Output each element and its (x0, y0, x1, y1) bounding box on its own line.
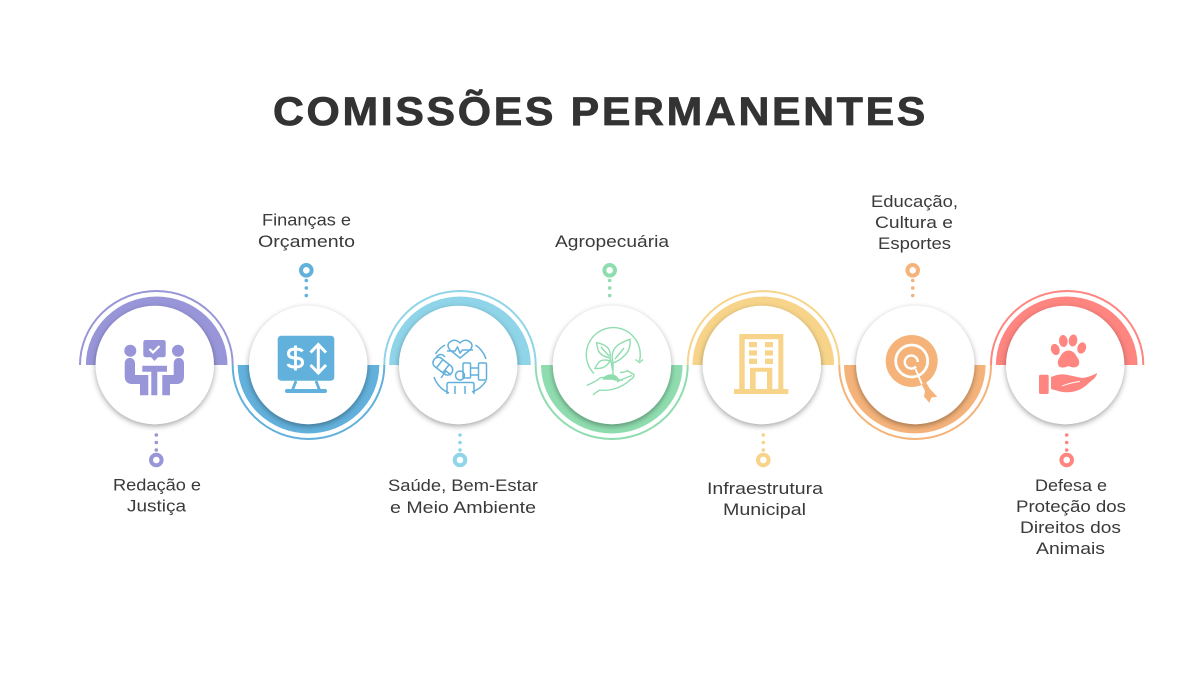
ring marker (1061, 455, 1072, 465)
icon: health and wellbeing (431, 340, 486, 394)
label: e Meio Ambiente (390, 499, 536, 517)
icon: meeting at table (124, 340, 184, 395)
panel: Agropecuária (536, 233, 688, 439)
label (1016, 477, 1126, 558)
label (388, 477, 539, 517)
label: Redação e (113, 476, 201, 494)
label: Direitos dos (1020, 519, 1121, 537)
label (113, 476, 201, 516)
connector dots (304, 279, 308, 297)
panel: Defesa e Proteção dos Direitos dos Animais (991, 291, 1143, 558)
ring marker (455, 455, 465, 465)
icon: monitor with dollar and arrows (278, 336, 334, 393)
label: Justiça (127, 498, 187, 516)
icon: target with arrow (886, 335, 938, 403)
label: Educação, (871, 193, 958, 211)
panel: Saúde, Bem-Estar e Meio Ambiente (384, 291, 539, 517)
label: Animais (1036, 540, 1105, 558)
icon: building (734, 334, 788, 394)
icon: plant in hand (586, 328, 643, 395)
label (871, 193, 958, 253)
label: Finanças e (262, 212, 351, 230)
label (707, 480, 824, 519)
panel: Finanças e Orçamento (233, 212, 384, 439)
label: Saúde, Bem-Estar (388, 477, 539, 495)
label: Esportes (878, 235, 951, 253)
connector dots (608, 279, 612, 297)
label: Proteção dos (1016, 498, 1126, 516)
connector dots (154, 433, 158, 452)
ring marker (907, 265, 918, 276)
panel: Educação, Cultura e Esportes (839, 193, 991, 439)
connector dots (911, 279, 914, 297)
label: Orçamento (258, 233, 355, 251)
label (258, 212, 355, 251)
label: Infraestrutura (707, 480, 824, 498)
label: Agropecuária (555, 233, 670, 251)
label: Defesa e (1035, 477, 1107, 495)
panel: Redação e Justiça (80, 291, 233, 516)
label: Cultura e (875, 214, 953, 232)
panel: Infraestrutura Municipal (688, 291, 839, 519)
icon: paw over hand (1039, 334, 1097, 394)
connector dots (1065, 433, 1068, 452)
ring marker (151, 455, 162, 465)
connector dots (458, 433, 462, 452)
ring marker (758, 455, 769, 465)
connector dots (762, 433, 765, 452)
ring marker (604, 265, 615, 276)
label: Municipal (723, 501, 806, 519)
title: COMISSÕES PERMANENTES (273, 88, 928, 134)
ring marker (301, 265, 312, 276)
